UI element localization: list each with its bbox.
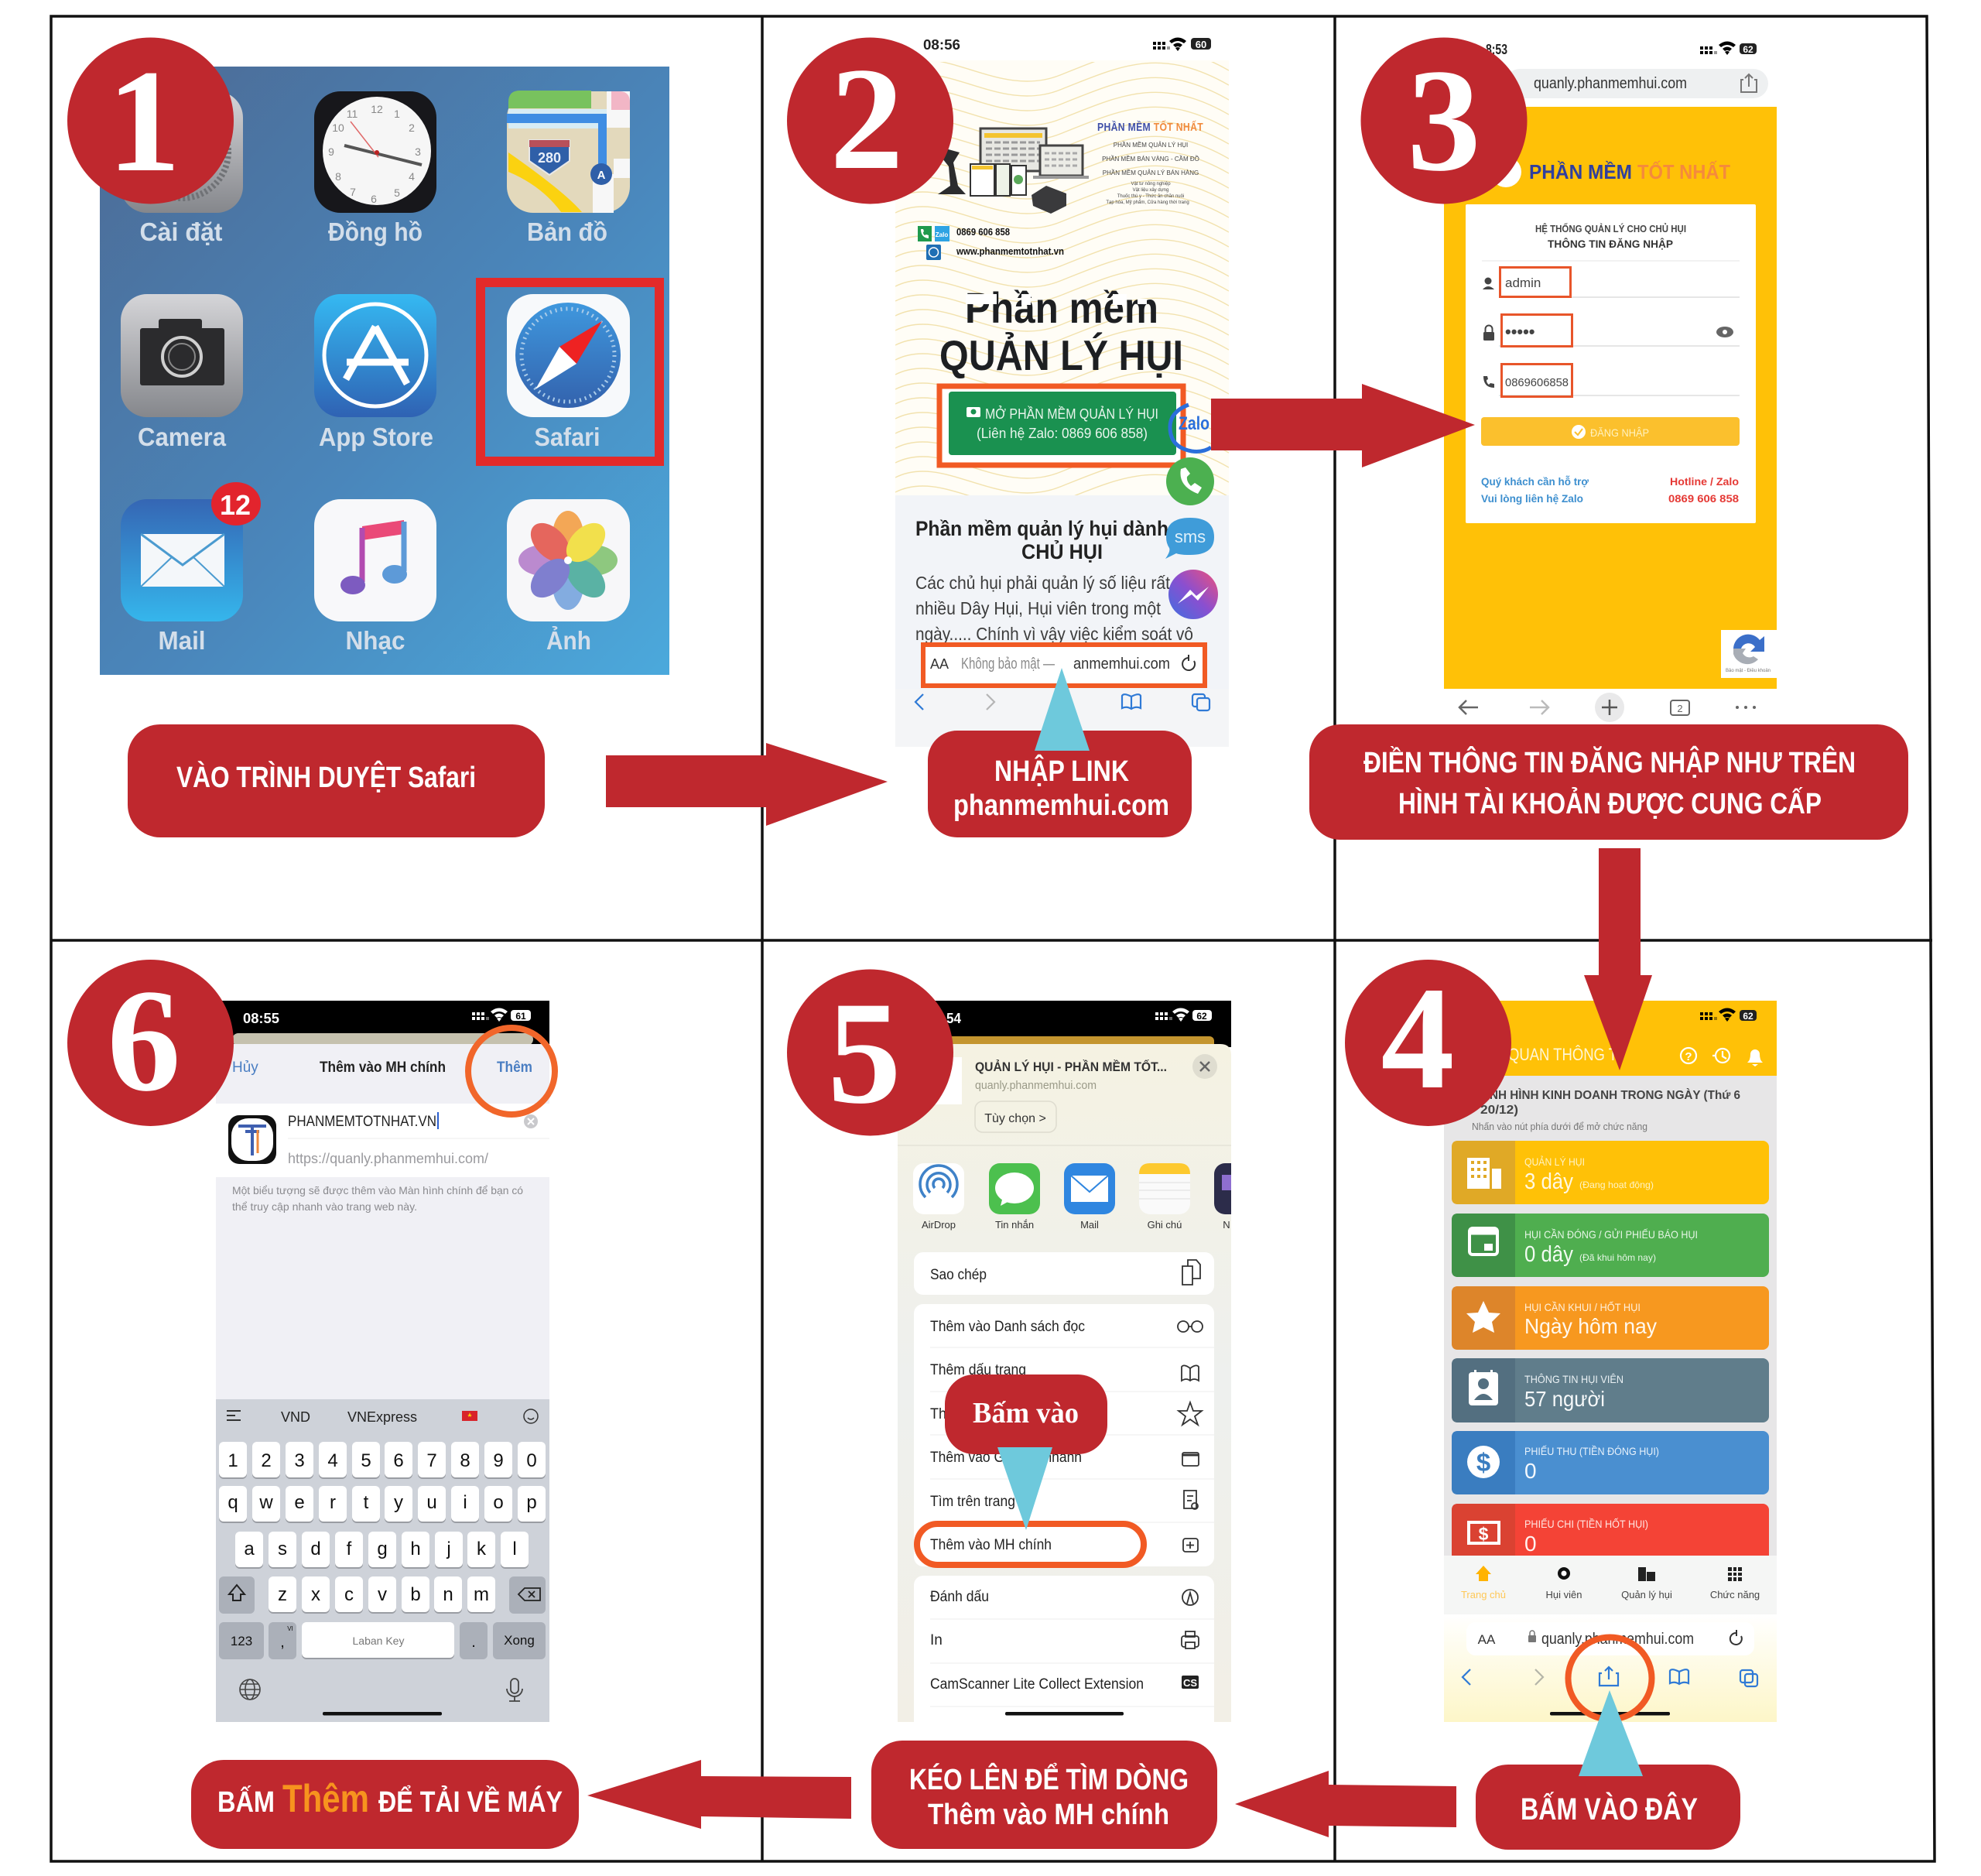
address bar text: AA xyxy=(930,656,949,672)
arrow: step 5 to step 6 xyxy=(587,1760,851,1829)
callout: step 6: Thêm xyxy=(282,1777,369,1820)
brand tagline: PHẦN MỀM BÁN VÀNG - CẦM ĐỒ xyxy=(1102,155,1199,163)
bookmark form: PHANMEMTOTNHAT.VN xyxy=(288,1114,436,1130)
icon: Zalo: Zalo xyxy=(1179,413,1209,434)
sheet header xyxy=(232,1060,532,1076)
app: Mail: Mail xyxy=(1080,1219,1099,1231)
step badge 1: 1 xyxy=(107,40,181,203)
address bar text: Không bảo mật — xyxy=(961,656,1055,673)
icon: clock: 11 xyxy=(347,108,358,120)
logo: TỐT NHẤT xyxy=(1637,160,1730,183)
key labels: Laban Key xyxy=(353,1635,404,1647)
support note: Quý khách cần hỗ trợ xyxy=(1481,475,1589,488)
url bar: quanly.phanmemhui.com xyxy=(1534,75,1687,92)
status bar: panel 5: 54 xyxy=(946,1011,961,1026)
status bar: panel 3: 62 xyxy=(1743,44,1753,55)
key labels: asdfghjkl xyxy=(244,1539,517,1559)
keyboard xyxy=(216,1399,549,1722)
browser toolbar xyxy=(895,689,1229,747)
header: QUAN THÔNG T xyxy=(1508,1045,1617,1064)
card: receipts: PHIẾU THU (TIỀN ĐÓNG HỤI) xyxy=(1524,1445,1659,1457)
login card: HỆ THỐNG QUẢN LÝ CHO CHỦ HỤI xyxy=(1535,223,1686,234)
support note: Vui lòng liên hệ Zalo xyxy=(1481,492,1583,505)
status bar: panel 5 xyxy=(947,1008,1212,1023)
browser nav icons xyxy=(915,694,1209,710)
action group: markup and others xyxy=(914,1576,1214,1731)
header: ? xyxy=(1685,1050,1692,1063)
icon: clock: 1 xyxy=(394,108,400,120)
callout: step 5: Thêm vào MH chính xyxy=(928,1799,1169,1831)
heading glitch overlay xyxy=(966,294,1147,305)
card: hui management: 3 dây xyxy=(1524,1169,1573,1194)
icon: microphone xyxy=(507,1679,522,1701)
site header: QUẢN LÝ HỤI - PHẦN MỀM TỐT... xyxy=(975,1059,1167,1074)
action group: markup and others: In xyxy=(930,1632,943,1648)
icon: music xyxy=(314,499,436,621)
label: photos: Ảnh xyxy=(546,626,591,655)
logo xyxy=(1490,156,1730,187)
card: payments xyxy=(1452,1504,1769,1567)
action group: page actions: Thêm vào MH chính xyxy=(930,1537,1052,1553)
browser nav icons: panel 4 xyxy=(1463,1667,1757,1686)
brand tagline: Vật liệu xây dựng xyxy=(1133,188,1168,193)
panel 2: browser landing page xyxy=(895,48,1229,747)
callout: step 2 xyxy=(928,731,1192,837)
label: clock: Đồng hồ xyxy=(328,217,423,246)
key labels: zxcvbnm xyxy=(278,1584,489,1605)
step badge 5 xyxy=(787,969,953,1136)
note: thể truy cập nhanh vào trang web này. xyxy=(232,1200,417,1213)
sheet header: Thêm vào MH chính xyxy=(320,1060,446,1076)
icon: clock: 7 xyxy=(350,186,356,198)
callout: step 3: ĐIỀN THÔNG TIN ĐĂNG NHẬP NHƯ TRÊN xyxy=(1363,745,1856,779)
brand tagline: Thuốc thú y - Thức ăn chăn nuôi xyxy=(1117,194,1184,199)
app: Notes: Ghi chú xyxy=(1148,1219,1182,1231)
key labels: , xyxy=(280,1634,285,1651)
bookmark form xyxy=(216,1104,549,1177)
callout: step 3 xyxy=(1309,724,1908,840)
icon: Zalo xyxy=(1170,405,1211,451)
step badge 2 xyxy=(787,37,953,204)
icon: safari xyxy=(507,294,630,417)
key labels: . xyxy=(471,1634,476,1651)
status bar: panel 2: 08:56 xyxy=(923,37,960,53)
card: dues: 0 dây xyxy=(1524,1242,1573,1267)
heading: QUẢN LÝ HỤI: QUẢN LÝ HỤI xyxy=(939,331,1183,379)
sheet header: Hủy xyxy=(232,1060,258,1076)
label: mail: Mail xyxy=(158,626,206,655)
card: hui to open: Ngày hôm nay xyxy=(1524,1314,1657,1338)
app: Messages xyxy=(989,1163,1040,1231)
label: settings: Cài đặt xyxy=(139,217,223,246)
heading: business overview: NH HÌNH KINH DOANH TRONG NGÀY (Thứ 6 xyxy=(1490,1087,1740,1102)
app: Messages: Tin nhắn xyxy=(995,1219,1034,1231)
step badge 3 xyxy=(1360,37,1528,204)
card: receipts: $ xyxy=(1476,1448,1490,1477)
icon: clock: 3 xyxy=(415,145,421,158)
label: app store: App Store xyxy=(319,423,433,451)
tab bar: Hụi viên xyxy=(1546,1589,1582,1600)
action group: copy: Sao chép xyxy=(930,1267,987,1283)
brand tagline: Tạp hóa, Mỹ phẩm, Cửa hàng thời trang xyxy=(1106,200,1189,205)
status bar: panel 6 xyxy=(243,1008,531,1026)
tab bar xyxy=(1444,1556,1777,1614)
icon: app store xyxy=(314,294,436,417)
step badge 5: 5 xyxy=(828,972,901,1135)
callout: step 2: phanmemhui.com xyxy=(953,789,1169,822)
status bar: panel 6: 61 xyxy=(515,1011,526,1022)
callout: step 3: HÌNH TÀI KHOẢN ĐƯỢC CUNG CẤP xyxy=(1398,786,1822,820)
bookmark form: https://quanly.phanmemhui.com/ xyxy=(288,1151,488,1166)
pointer: step 4 xyxy=(1579,1690,1643,1776)
illustration: POS devices xyxy=(938,128,1089,214)
card: dues xyxy=(1452,1214,1769,1277)
action group: markup and others: CamScanner Lite Collect Extension xyxy=(930,1676,1144,1693)
field: password xyxy=(1483,314,1733,347)
panel 6: add to home screen with keyboard xyxy=(216,1001,555,1722)
status bar: panel 2 xyxy=(923,37,1211,53)
browser bar xyxy=(1444,1614,1777,1722)
brand tagline: PHẦN MỀM QUẢN LÝ HỤI xyxy=(1114,141,1188,149)
tab bar: Quản lý hụi xyxy=(1621,1589,1672,1600)
site header: Tùy chọn > xyxy=(984,1112,1046,1125)
login button: ĐĂNG NHẬP xyxy=(1590,426,1649,439)
paragraph xyxy=(915,573,1193,644)
browser bar: quanly.phanmemhui.com xyxy=(1541,1631,1694,1648)
contact row: 0869 606 858 xyxy=(956,226,1010,238)
label: maps: Bản đồ xyxy=(527,217,607,246)
address bar highlight xyxy=(923,645,1205,686)
tab bar: Trang chủ xyxy=(1461,1589,1506,1600)
card: dues: (Đã khui hôm nay) xyxy=(1579,1252,1656,1263)
paragraph: nhiều Dây Hụi, Hụi viên trong một xyxy=(915,598,1162,618)
icon: camera xyxy=(121,294,243,417)
hint: Nhấn vào nút phía dưới để mở chức năng xyxy=(1472,1121,1647,1132)
label: camera: Camera xyxy=(138,423,227,451)
brand tagline: Vật tư nông nghiệp xyxy=(1131,182,1171,187)
key caps xyxy=(219,1442,546,1659)
status bar: panel 4: 62 xyxy=(1743,1011,1753,1022)
action group: copy xyxy=(914,1252,1214,1295)
icon: clock xyxy=(314,91,436,213)
button: open software: MỞ PHẦN MỀM QUẢN LÝ HỤI xyxy=(985,406,1158,422)
support note: 0869 606 858 xyxy=(1668,492,1739,505)
panel 1: iPhone home screen xyxy=(100,67,669,675)
card: members: 57 người xyxy=(1524,1387,1605,1411)
highlight box: safari xyxy=(481,282,659,461)
sheet header: Thêm xyxy=(497,1060,532,1076)
tab bar: Chức năng xyxy=(1710,1589,1760,1600)
card: hui management: QUẢN LÝ HỤI xyxy=(1524,1155,1585,1168)
heading: description: Phần mềm quản lý hụi dành xyxy=(915,517,1168,540)
highlight oval: add to home xyxy=(917,1524,1144,1565)
card: receipts xyxy=(1452,1431,1769,1494)
icon: sms xyxy=(1165,518,1214,559)
app: Notes xyxy=(1139,1163,1190,1231)
action group: page actions xyxy=(914,1304,1214,1566)
label: safari: Safari xyxy=(534,423,600,451)
heading: description line two: CHỦ HỤI xyxy=(1021,539,1103,563)
arrow: step 2 to step 3 xyxy=(1211,384,1475,467)
contact row xyxy=(918,226,1064,260)
callout: step 6: BẤM xyxy=(217,1785,275,1819)
icon: clock: 2 xyxy=(409,122,415,134)
step badge 3: 3 xyxy=(1407,39,1481,202)
step badge 4 xyxy=(1345,957,1511,1126)
key labels: 1234567890 xyxy=(228,1450,537,1471)
icon: clock: 5 xyxy=(394,187,400,199)
card: dues: HỤI CẦN ĐÓNG / GỬI PHIẾU BÁO HỤI xyxy=(1524,1227,1698,1241)
heading: business overview xyxy=(1480,1087,1740,1117)
note xyxy=(232,1184,523,1213)
callout: tap here xyxy=(945,1374,1107,1454)
icon: clock: 9 xyxy=(328,145,334,158)
icon: clock: 4 xyxy=(409,170,415,183)
decorative contour lines xyxy=(895,48,1229,508)
step badge 1 xyxy=(67,37,234,204)
action group: page actions: Thêm vào Ghi chú nhanh xyxy=(930,1450,1082,1466)
contact row: Zalo xyxy=(936,231,948,238)
status bar: panel 4 xyxy=(1700,1008,1757,1022)
status bar: panel 2: 60 xyxy=(1196,39,1206,50)
button highlight xyxy=(939,386,1183,465)
card: hui management: (Đang hoạt động) xyxy=(1579,1179,1654,1190)
badge: 12: 12 xyxy=(220,489,251,521)
action group: markup and others: CS xyxy=(1183,1677,1197,1689)
callout: step 6: ĐỂ TẢI VỀ MÁY xyxy=(378,1784,563,1819)
heading: business overview: 20/12) xyxy=(1480,1104,1518,1117)
suggestion row: VNExpress xyxy=(347,1409,417,1425)
card stack xyxy=(1452,1141,1769,1567)
suggestion row: VND xyxy=(281,1409,310,1425)
recaptcha badge: Bảo mật - Điều khoản xyxy=(1726,669,1771,673)
card: hui management xyxy=(1452,1141,1769,1204)
label: music: Nhạc xyxy=(345,626,405,655)
action group: page actions: Thêm vào Danh sách đọc xyxy=(930,1319,1085,1335)
app: AirDrop xyxy=(913,1163,964,1231)
icon: maps: A xyxy=(597,169,606,182)
note: Một biểu tượng sẽ được thêm vào Màn hình chính để bạn có xyxy=(232,1184,523,1196)
card: payments: 0 xyxy=(1524,1532,1537,1556)
card: members xyxy=(1452,1358,1769,1422)
app: partially visible: N xyxy=(1223,1219,1230,1231)
login card: THÔNG TIN ĐĂNG NHẬP xyxy=(1548,237,1673,250)
key labels xyxy=(228,1450,537,1651)
card: members: THÔNG TIN HỤI VIÊN xyxy=(1524,1373,1623,1385)
status bar: panel 3 xyxy=(1486,42,1757,57)
step badge 4: 4 xyxy=(1381,957,1455,1120)
key labels: qwertyuiop xyxy=(228,1492,537,1513)
icon: globe xyxy=(240,1679,260,1700)
app: AirDrop: AirDrop xyxy=(922,1219,956,1231)
field: phone: 0869606858 xyxy=(1505,376,1569,389)
support note: Hotline / Zalo xyxy=(1670,475,1739,488)
icon: settings xyxy=(121,91,243,213)
arrow: step 4 to step 5 xyxy=(1235,1771,1456,1837)
url bar xyxy=(1505,69,1768,98)
login button xyxy=(1481,417,1740,446)
site header xyxy=(898,1054,1231,1145)
icon: sms: sms xyxy=(1175,527,1206,546)
card: hui to open xyxy=(1452,1286,1769,1350)
button: open software: (Liên hệ Zalo: 0869 606 858) xyxy=(977,426,1148,441)
icon: maps: 280 xyxy=(538,150,561,166)
logo: PHẦN MỀM xyxy=(1529,160,1632,183)
login card xyxy=(1466,204,1756,523)
callout: step 2: NHẬP LINK xyxy=(994,754,1129,788)
panel 3: login screen: 2 xyxy=(1677,703,1683,714)
browser bar: AA xyxy=(1478,1632,1496,1647)
key labels: VI xyxy=(287,1625,293,1632)
step badge 6: 6 xyxy=(107,960,181,1122)
icon: refresh xyxy=(1182,655,1195,670)
panel 5: iOS share sheet xyxy=(898,1001,1231,1722)
site header: quanly.phanmemhui.com xyxy=(975,1079,1097,1092)
icon: clock: 10 xyxy=(332,122,344,134)
status bar: panel 5: 62 xyxy=(1196,1011,1207,1022)
icon: clock: 6 xyxy=(371,193,377,205)
support note xyxy=(1481,475,1739,505)
field: password: ••••• xyxy=(1505,322,1535,341)
icon: maps xyxy=(507,91,630,213)
card: hui to open: HỤI CẦN KHUI / HỐT HỤI xyxy=(1524,1300,1641,1313)
highlight circle: share button xyxy=(1568,1638,1651,1720)
paragraph: ngày..... Chính vì vậy việc kiểm soát vô xyxy=(915,624,1193,644)
app icon xyxy=(228,1115,276,1164)
panel 3: login screen xyxy=(1444,42,1777,722)
key labels: 123 xyxy=(231,1634,252,1648)
icon: phone xyxy=(1166,457,1214,505)
contact row: www.phanmemtotnhat.vn xyxy=(956,245,1064,257)
icon: photos xyxy=(507,499,630,621)
status bar: panel 6: 08:55 xyxy=(243,1011,279,1026)
recaptcha badge xyxy=(1721,630,1777,678)
callout: step 4: BẤM VÀO ĐÂY xyxy=(1521,1791,1698,1826)
heading: Phần mềm: Phần mềm xyxy=(965,283,1158,332)
card: payments: $ xyxy=(1479,1524,1489,1544)
action group: page actions: Thêm vào Mục ưa thích xyxy=(930,1406,1077,1422)
action group: markup and others: Đánh dấu xyxy=(930,1589,989,1605)
header xyxy=(1508,1045,1763,1066)
bottom browser nav: panel 3 xyxy=(1459,693,1756,722)
app: partially visible xyxy=(1214,1163,1265,1231)
callout: step 5: KÉO LÊN ĐỂ TÌM DÒNG xyxy=(909,1761,1189,1796)
action group: page actions: Tìm trên trang xyxy=(930,1494,1015,1510)
icon: messenger xyxy=(1168,570,1218,619)
address bar text: anmemhui.com xyxy=(1073,656,1170,673)
address bar text xyxy=(930,656,1169,672)
arrow: step 1 to step 2 xyxy=(606,743,888,826)
brand tagline: PHẦN MỀM QUẢN LÝ BÁN HÀNG xyxy=(1103,169,1199,176)
card: payments: PHIẾU CHI (TIỀN HỐT HỤI) xyxy=(1524,1517,1648,1530)
status bar: panel 3: 8:53 xyxy=(1486,42,1507,57)
suggestion row xyxy=(227,1409,538,1425)
callout: step 1: VÀO TRÌNH DUYỆT Safari xyxy=(176,760,476,794)
highlight circle: Thêm button xyxy=(468,1028,555,1114)
key labels: Xong xyxy=(504,1633,535,1648)
field: username: admin xyxy=(1505,276,1541,290)
button: open software xyxy=(949,392,1176,455)
callout: tap here: Bấm vào xyxy=(973,1397,1079,1429)
callout: step 1 xyxy=(128,724,545,837)
icon: clock: 8 xyxy=(335,170,341,183)
badge: 12 xyxy=(211,482,261,525)
step badge 6 xyxy=(67,960,234,1126)
icon: mail xyxy=(121,499,243,621)
brand heading: PHẦN MỀM TỐT NHẤT xyxy=(1097,120,1203,134)
action group: page actions: Thêm dấu trang xyxy=(930,1362,1026,1378)
pointer: step 2 xyxy=(1035,668,1090,751)
callout: step 5 xyxy=(871,1741,1217,1849)
app: Mail xyxy=(1064,1163,1115,1231)
callout: step 4 xyxy=(1476,1765,1740,1850)
paragraph: Các chủ hụi phải quản lý số liệu rất xyxy=(915,573,1171,593)
arrow: step 3 to step 4 xyxy=(1584,848,1652,1070)
field: username xyxy=(1483,268,1571,297)
callout: step 6 xyxy=(191,1760,579,1849)
icon: backspace xyxy=(518,1588,540,1600)
icon: clock: 12 xyxy=(371,103,383,115)
step badge 2: 2 xyxy=(830,38,904,200)
brand tagline xyxy=(1102,141,1199,205)
pointer: tap here xyxy=(997,1447,1052,1530)
panel 4: dashboard screen xyxy=(1444,1001,1777,1722)
field: phone xyxy=(1483,364,1572,396)
icon: shift xyxy=(229,1585,245,1600)
card: receipts: 0 xyxy=(1524,1459,1537,1483)
